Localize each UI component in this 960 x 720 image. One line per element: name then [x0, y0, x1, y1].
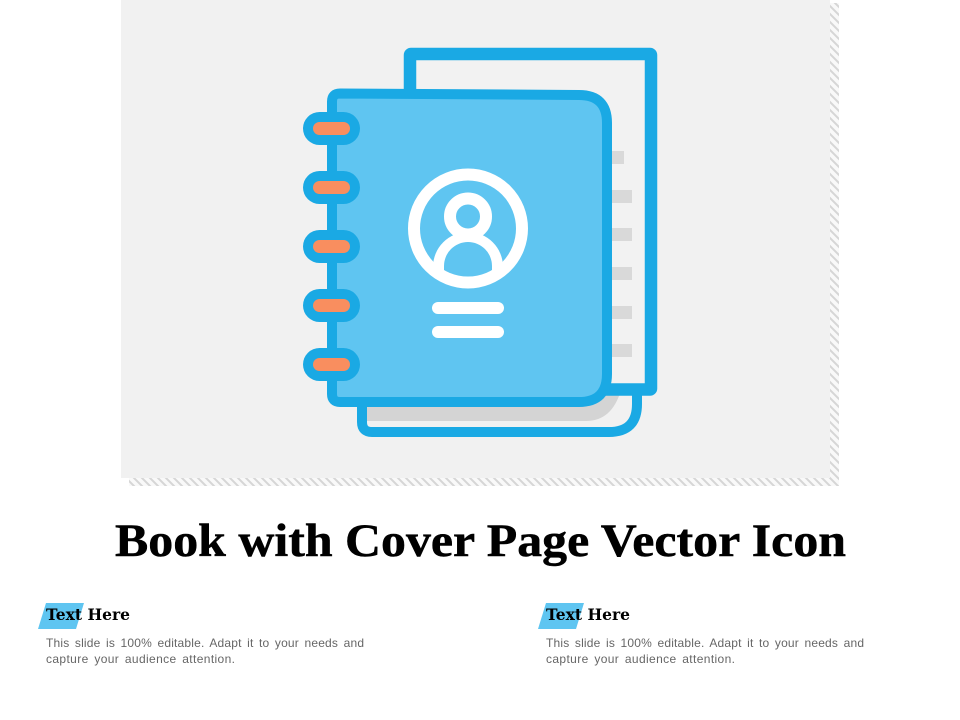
lower page block — [362, 380, 637, 432]
text block: right — [538, 603, 864, 666]
icon: book with cover page — [303, 54, 651, 432]
spiral ring 1 — [303, 112, 360, 145]
accent tag — [538, 603, 584, 629]
body text: This slide is 100% editable. Adapt it to your needs and — [546, 636, 864, 650]
spiral ring 4 — [303, 289, 360, 322]
body text: This slide is 100% editable. Adapt it to your needs and — [46, 636, 364, 650]
subheading: Text Here — [46, 605, 130, 624]
hatched panel shadow — [129, 3, 839, 486]
text block: left — [38, 603, 364, 666]
spiral ring 3 — [303, 230, 360, 263]
name lines — [432, 302, 504, 338]
front cover — [332, 94, 607, 402]
page text lines — [606, 151, 632, 357]
body text: capture your audience attention. — [46, 652, 235, 666]
body text: capture your audience attention. — [546, 652, 735, 666]
back page — [410, 54, 651, 390]
spiral ring 5 — [303, 348, 360, 381]
accent tag — [38, 603, 84, 629]
body text — [546, 636, 864, 666]
title: Book with Cover Page Vector Icon — [115, 515, 846, 567]
panel: grey icon background — [121, 0, 830, 478]
body text — [46, 636, 364, 666]
subheading: Text Here — [546, 605, 630, 624]
spiral ring 2 — [303, 171, 360, 204]
icon: profile portrait — [414, 174, 522, 300]
